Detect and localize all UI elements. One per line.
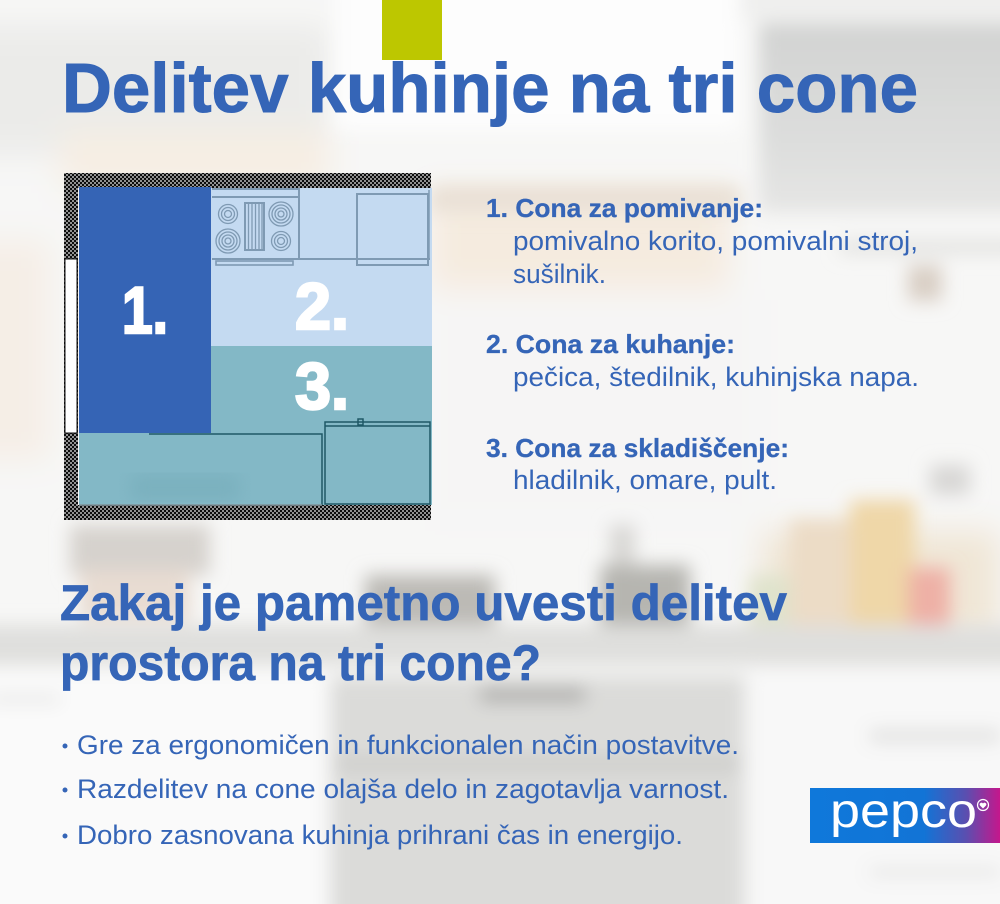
- subheading: prostora na tri cone?: [60, 635, 541, 691]
- zone 1 text: sušilnik.: [513, 259, 606, 289]
- stove and counter outlines: [212, 189, 430, 265]
- zone 1: 1.: [122, 273, 168, 347]
- zone 1 text: [486, 193, 918, 289]
- zone list: [486, 193, 919, 495]
- zone 2: 2.: [295, 269, 349, 343]
- zone 3 text: hladilnik, omare, pult.: [513, 465, 777, 495]
- subheading: Zakaj je pametno uvesti delitev: [60, 575, 787, 631]
- bullet list: Dobro zasnovana kuhinja prihrani čas in energijo.: [77, 820, 683, 850]
- bullet list: Razdelitev na cone olajša delo in zagotavlja varnost.: [77, 774, 729, 804]
- zone 2 text: [486, 329, 919, 392]
- zone 2 text: 2. Cona za kuhanje:: [486, 329, 735, 359]
- kitchen floor plan: [64, 173, 432, 520]
- bullet list: [62, 730, 739, 850]
- pepco logo: [810, 785, 1000, 843]
- green accent tab: [382, 0, 442, 60]
- zone 1: [79, 187, 211, 433]
- zone 3 text: [486, 433, 789, 495]
- zone 1 text: 1. Cona za pomivanje:: [486, 193, 763, 223]
- zone 1 text: pomivalno korito, pomivalni stroj,: [513, 226, 918, 256]
- zone 2: [211, 188, 432, 346]
- zone 2 text: pečica, štedilnik, kuhinjska napa.: [513, 362, 919, 392]
- title: Delitev kuhinje na tri cone: [62, 49, 918, 127]
- window: [65, 259, 77, 433]
- zone 3 text: 3. Cona za skladiščenje:: [486, 433, 789, 463]
- bullet list: Gre za ergonomičen in funkcionalen način postavitve.: [77, 730, 739, 760]
- zone 3: 3.: [295, 349, 349, 423]
- subheading: [60, 575, 787, 691]
- walls: [64, 173, 431, 520]
- pepco logo: pepco: [830, 785, 977, 838]
- zone 3: [79, 346, 432, 505]
